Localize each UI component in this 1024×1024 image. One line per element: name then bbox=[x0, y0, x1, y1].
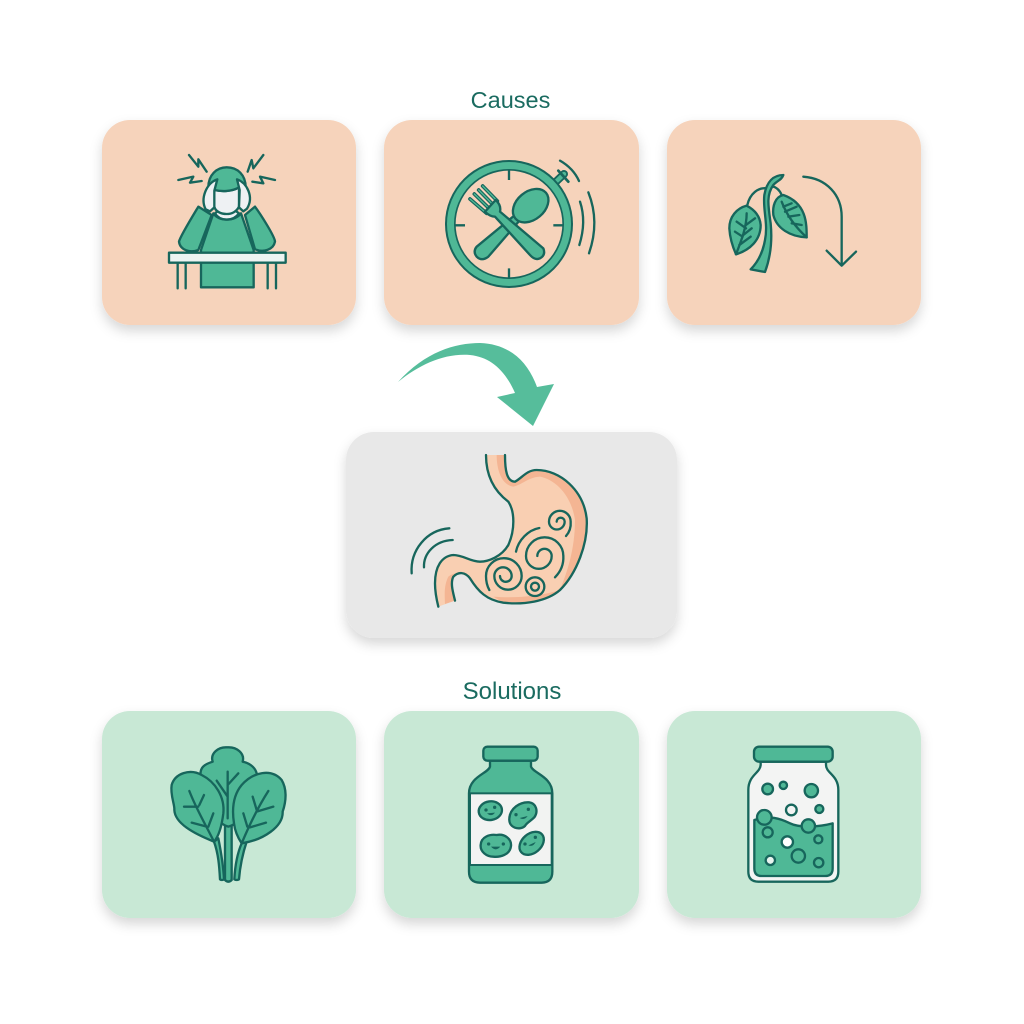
panel: solution probiotic supplement bbox=[384, 711, 639, 918]
heading: Causes: Causes bbox=[471, 87, 550, 113]
icon: fermentation jar bbox=[748, 747, 838, 882]
panel: solution leafy greens bbox=[102, 711, 356, 918]
arrow: causes to stomach bbox=[398, 343, 554, 426]
icon: wilting leaves with down arrow bbox=[729, 175, 856, 272]
panel: stomach bbox=[346, 432, 677, 638]
icon: stressed person at desk bbox=[169, 155, 286, 288]
panel: cause stress bbox=[102, 120, 356, 325]
icon: stomach with swirls bbox=[412, 455, 587, 607]
panel: cause irregular meals bbox=[384, 120, 639, 325]
icon: spinach bunch bbox=[171, 747, 286, 882]
panel: solution fermented food bbox=[667, 711, 921, 918]
heading: Solutions: Solutions bbox=[463, 678, 561, 705]
icon: clock with fork and spoon bbox=[445, 160, 594, 288]
icon: probiotic bottle bbox=[469, 747, 552, 883]
panel: cause wilting plant bbox=[667, 120, 921, 325]
